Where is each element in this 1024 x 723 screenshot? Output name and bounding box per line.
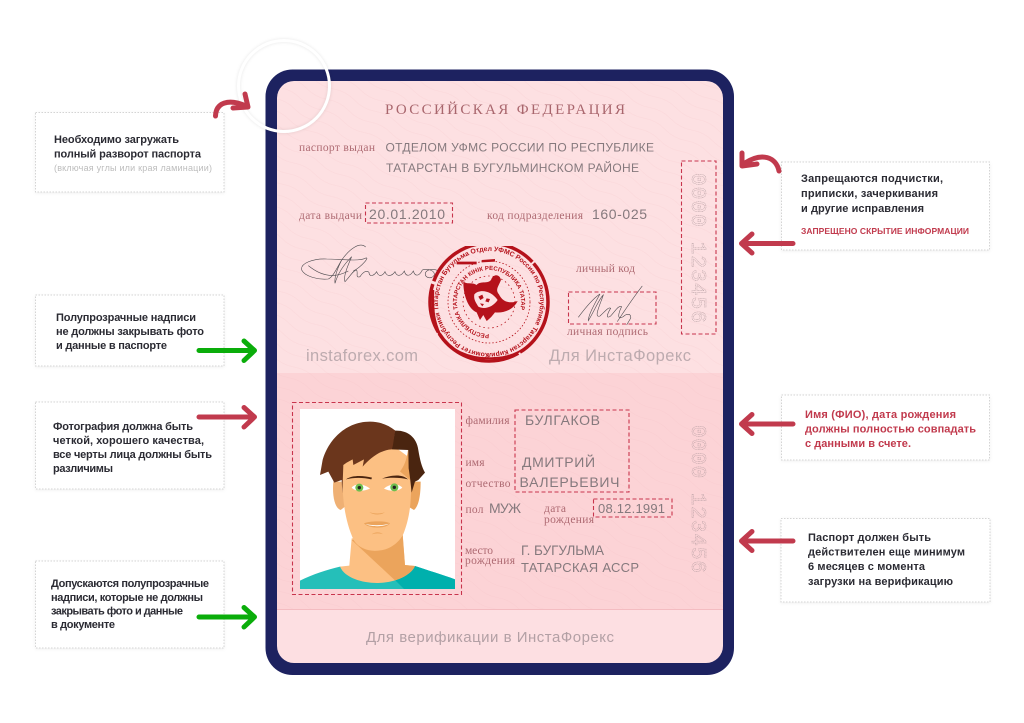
dashed highlight: serial number xyxy=(682,161,716,334)
labels: personal data: рождения xyxy=(544,514,595,526)
labels: personal data: отчество xyxy=(466,478,511,490)
card: full spread: полный разворот паспорта xyxy=(54,148,202,160)
card: photo quality: Фотография должна быть xyxy=(53,421,193,433)
card: translucent captions allowed: в документе xyxy=(51,619,115,631)
values: personal data: ТАТАРСКАЯ АССР xyxy=(521,560,639,575)
stamp: РЕСПУБЛИКА ТАТАРСТАН КІНІК РЕСПУБЛИКА ТАТАР xyxy=(452,266,526,338)
arrow: curved to corner xyxy=(216,94,248,116)
card: translucent captions forbidden xyxy=(36,295,224,366)
dashed highlight: issue date xyxy=(366,203,452,223)
arrow: red to serial number xyxy=(742,234,793,253)
card: full spread: Необходимо загружать xyxy=(54,134,179,146)
label: passport issued by: паспорт выдан xyxy=(299,142,375,154)
values: personal data: МУЖ xyxy=(489,500,521,516)
card: validity: загрузки на верификацию xyxy=(808,576,953,588)
card: translucent captions forbidden: не должны закрывать фото xyxy=(56,326,204,338)
card: photo quality: все черты лица должны быть xyxy=(53,449,212,461)
values: personal data: Г. БУГУЛЬМА xyxy=(521,543,604,558)
heading: Russian Federation: РОССИЙСКАЯ ФЕДЕРАЦИЯ xyxy=(385,101,625,118)
card: corrections forbidden: ЗАПРЕЩЕНО СКРЫТИЕ ИНФОРМАЦИИ xyxy=(801,226,969,236)
arrow: green to footer xyxy=(199,608,254,627)
card: translucent captions allowed: надписи, которые не должны xyxy=(51,592,203,604)
labels: personal data: имя xyxy=(466,457,485,469)
values: personal data: БУЛГАКОВ xyxy=(525,412,600,428)
value: department code: 160-025 xyxy=(592,206,647,222)
arrow: red to name xyxy=(742,414,793,434)
corner highlight circle xyxy=(238,40,330,132)
issuing page text xyxy=(299,101,716,365)
values: personal data: ДМИТРИЙ xyxy=(522,453,595,470)
value: issuing authority xyxy=(386,140,654,175)
arrow: curved to serial number xyxy=(742,153,779,171)
label: issue date: дата выдачи xyxy=(299,210,362,222)
labels: personal data: фамилия xyxy=(466,415,510,427)
stamp: Комитет Республики Татарстан Бугульма Отдел УФМС России по Республике Татарстан Кириллов Министерство xyxy=(434,246,545,358)
card: full spread xyxy=(36,112,224,192)
card: validity xyxy=(781,518,990,602)
values: personal data: 08.12.1991 xyxy=(598,501,665,516)
signature: holder xyxy=(578,286,642,325)
personal data page xyxy=(292,402,708,594)
card: translucent captions forbidden: Полупрозрачные надписи xyxy=(56,312,196,324)
card: name and birth date match: Имя (ФИО), дата рождения xyxy=(805,409,956,421)
card: photo quality: четкой, хорошего качества, xyxy=(53,435,204,447)
labels: personal data: пол xyxy=(466,504,484,516)
card: corrections forbidden: и другие исправления xyxy=(801,203,924,215)
dashed highlight: birth date xyxy=(594,499,672,517)
card: full spread: (включая углы или края ламинации) xyxy=(54,163,212,173)
card: translucent captions allowed: Допускаются полупрозрачные xyxy=(51,578,209,590)
values: personal data: ВАЛЕРЬЕВИЧ xyxy=(520,474,620,490)
card: translucent captions allowed: закрывать фото и данные xyxy=(51,606,183,618)
card: corrections forbidden xyxy=(782,162,990,250)
serial number bottom: 0000 123456 xyxy=(685,425,708,573)
watermark: for InstaForex: Для ИнстаФорекс xyxy=(549,347,691,365)
value: issuing authority: ОТДЕЛОМ УФМС РОССИИ ПО РЕСПУБЛИКЕ xyxy=(386,140,654,154)
card: name and birth date match: с данными в счете. xyxy=(805,438,911,450)
card: translucent captions forbidden: и данные в паспорте xyxy=(56,340,167,352)
label: department code: код подразделения xyxy=(487,210,584,222)
card: validity: Паспорт должен быть xyxy=(808,532,931,544)
value: issuing authority: ТАТАРСТАН В БУГУЛЬМИНСКОМ РАЙОНЕ xyxy=(386,160,639,175)
card: validity: 6 месяцев с момента xyxy=(808,561,926,573)
card: name and birth date match xyxy=(782,395,990,460)
passport frame xyxy=(266,70,734,675)
portrait photo xyxy=(300,409,455,589)
card: photo quality xyxy=(36,402,224,489)
serial number top: 0000 123456 xyxy=(685,173,708,323)
labels: personal data: рождения xyxy=(465,555,516,567)
stamp xyxy=(428,246,550,363)
card: validity: действителен еще минимум xyxy=(808,546,965,558)
signature: issuing officer xyxy=(302,245,439,283)
card: photo quality: различимы xyxy=(53,463,113,475)
arrow: red to photo xyxy=(199,408,254,427)
footer watermark: Для верификации в ИнстаФорекс xyxy=(366,629,614,646)
labels: personal data: место xyxy=(465,545,493,557)
arrow: green to watermark xyxy=(199,341,254,360)
labels: personal data xyxy=(465,415,595,567)
dashed highlight: photo xyxy=(292,402,462,594)
passport pages xyxy=(277,81,723,663)
arrow: red to validity xyxy=(742,532,793,550)
stamp eagle xyxy=(457,259,518,321)
card: corrections forbidden: приписки, зачеркивания xyxy=(801,188,938,200)
dashed highlight: name xyxy=(515,410,629,492)
card: corrections forbidden: Запрещаются подчистки, xyxy=(801,173,943,185)
card: name and birth date match: должны полностью совпадать xyxy=(805,424,976,436)
label: personal code: личный код xyxy=(576,263,635,275)
dashed highlight: signature xyxy=(568,292,656,324)
value: issue date: 20.01.2010 xyxy=(369,206,445,222)
watermark: instaforex.com: instaforex.com xyxy=(306,347,418,365)
card: translucent captions allowed xyxy=(36,561,224,648)
labels: personal data: дата xyxy=(544,503,566,515)
values: personal data xyxy=(489,412,665,575)
label: personal signature: личная подпись xyxy=(567,326,648,338)
